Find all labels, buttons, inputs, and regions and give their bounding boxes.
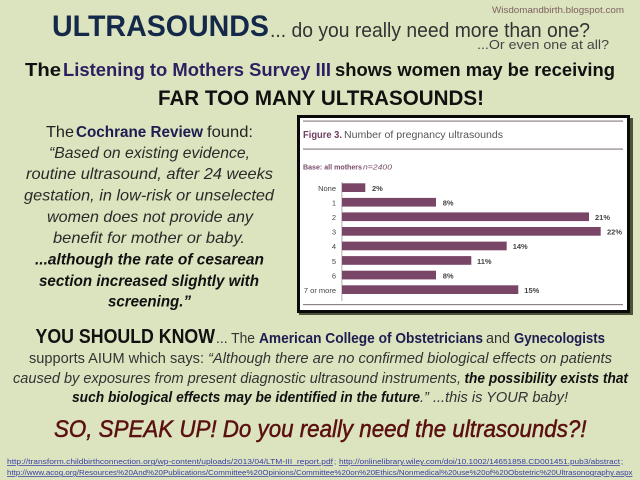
chart base note: Base: all mothers (303, 164, 362, 172)
bar: 4 14% (332, 242, 528, 251)
source links: http://www.acog.org/Resources%20And%20Publications/Committee%20Opinions/Committee%20on%20Ethics/Nonmedical%20use%20of%20Obstetric%20Ultrasonography.aspx (7, 468, 633, 477)
you should know heading line: ... The (216, 330, 255, 347)
bar: 6 8%: 8% (443, 271, 454, 280)
you should know heading line: YOU SHOULD KNOW (36, 326, 215, 348)
quote bold conclusion: section increased slightly with (39, 273, 259, 290)
quote body (24, 145, 275, 247)
survey headline: Listening to Mothers Survey III (63, 59, 331, 80)
source links: http://onlinelibrary.wiley.com/doi/10.1002/14651858.CD001451.pub3/abstract (339, 457, 621, 466)
AIUM quote: supports AIUM which says: (29, 350, 204, 367)
bar: 1 8% (332, 198, 454, 208)
subtitle note: ...Or even one at all? (477, 38, 609, 52)
bar: 2 21%: 2 (332, 213, 336, 222)
chart title: Number of pregnancy ultrasounds (344, 130, 503, 141)
AIUM quote: caused by exposures from present diagnostic ultrasound instruments, (13, 370, 461, 387)
AIUM quote: such biological effects may be identified in the future (72, 389, 420, 406)
quote body: “Based on existing evidence, (49, 145, 250, 162)
bar: 1 8%: 8% (443, 198, 454, 208)
source links: http://transform.childbirthconnection.org/wp-content/uploads/2013/04/LTM-III_report.pdf (7, 457, 334, 466)
quote intro (46, 124, 253, 141)
you should know heading line: Gynecologists (514, 330, 605, 347)
bar: 5 11% (332, 256, 492, 266)
source links (7, 457, 633, 477)
bar: 6 8% (332, 271, 454, 280)
bar: 4 14%: 14% (513, 242, 528, 251)
bar: 4 14%: 4 (332, 242, 336, 251)
bar: 2 21%: 21% (595, 213, 610, 222)
quote bold conclusion: screening.” (108, 294, 191, 310)
bar: 3 22%: 3 (332, 228, 336, 237)
quote bold conclusion: ...although the rate of cesarean (35, 252, 264, 268)
survey headline (25, 59, 615, 80)
chart title: Figure 3. (303, 130, 342, 141)
bar chart (304, 182, 622, 301)
title (52, 10, 590, 43)
AIUM quote: .” ...this is YOUR baby! (420, 389, 569, 406)
survey headline: The (25, 59, 61, 80)
quote bold conclusion (35, 252, 264, 310)
quote intro: found: (207, 124, 253, 141)
AIUM quote (13, 350, 629, 406)
bar: None 2%: None (318, 184, 336, 193)
chart base note: n=2400 (363, 164, 392, 172)
quote body: gestation, in low-risk or unselected (24, 188, 275, 204)
blog credit: Wisdomandbirth.blogspot.com (492, 5, 624, 15)
title: ULTRASOUNDS (52, 10, 269, 43)
survey headline: shows women may be receiving (335, 59, 615, 80)
panel: Cochrane Review quote (24, 124, 275, 310)
bar: 2 21% (332, 212, 610, 222)
AIUM quote: “Although there are no confirmed biological effects on patients (208, 350, 612, 367)
bar: 6 8%: 6 (332, 271, 336, 280)
quote body: benefit for mother or baby. (53, 230, 245, 247)
call to action: SO, SPEAK UP! Do you really need the ultrasounds?! (54, 416, 587, 443)
quote body: women does not provide any (47, 209, 254, 226)
emphasis headline: FAR TOO MANY ULTRASOUNDS! (158, 86, 484, 110)
bar: 7 or more 15% (304, 285, 540, 295)
bar: None 2% (318, 183, 383, 193)
quote intro: Cochrane Review (76, 124, 204, 141)
you should know heading line (36, 326, 605, 348)
source links: ; (334, 457, 336, 466)
you should know heading line: and (486, 330, 510, 347)
source links: ; (621, 457, 623, 466)
quote intro: The (46, 124, 74, 141)
you should know heading line: American College of Obstetricians (259, 330, 483, 347)
bar: None 2%: 2% (372, 184, 383, 193)
bar: 3 22%: 22% (607, 228, 622, 237)
bar: 3 22% (332, 227, 622, 237)
title: ... do you really need more than one? (270, 20, 590, 42)
bar: 1 8%: 1 (332, 198, 336, 208)
bar: 7 or more 15%: 7 or more (304, 286, 336, 295)
bar: 5 11%: 5 (332, 257, 336, 266)
AIUM quote: the possibility exists that (464, 370, 629, 387)
quote body: routine ultrasound, after 24 weeks (26, 166, 273, 183)
bar: 7 or more 15%: 15% (524, 286, 540, 295)
chart base note (303, 164, 392, 172)
text block: you should know (13, 326, 629, 406)
bar: 5 11%: 11% (477, 257, 492, 266)
panel: bar chart figure (298, 116, 633, 315)
